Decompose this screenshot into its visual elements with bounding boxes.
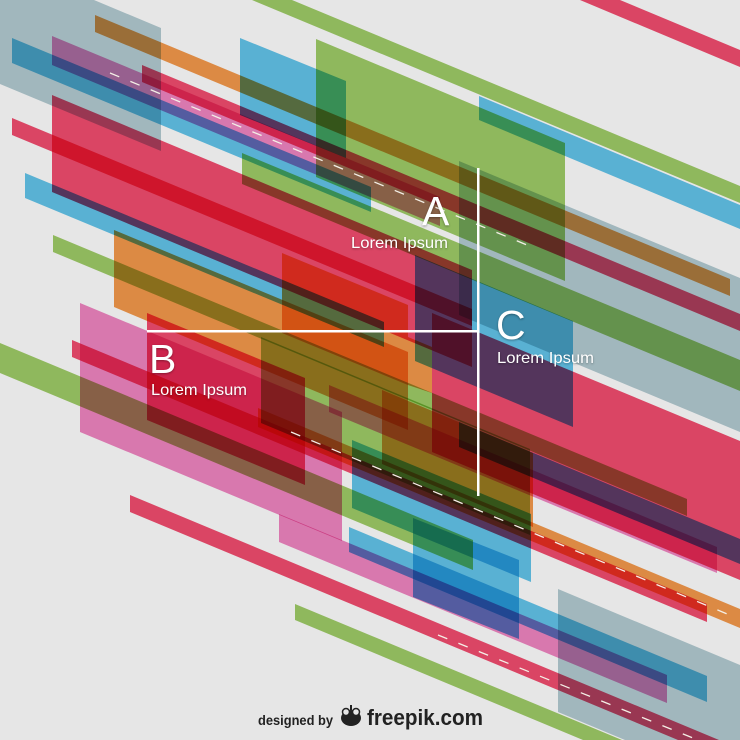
strip: red over large red	[12, 118, 472, 326]
box: lower orange	[382, 390, 533, 527]
box: upper blue	[240, 38, 346, 158]
strip: top right red	[580, 0, 740, 67]
box: large orange	[114, 230, 408, 430]
box: large green	[316, 39, 565, 281]
strip: dashed orange	[258, 408, 740, 628]
strip: right blue	[479, 96, 740, 229]
strip: mid blue	[25, 173, 384, 347]
strip: long orange	[95, 15, 730, 296]
strip: wide green	[242, 153, 740, 391]
strip: right blue lower	[459, 422, 740, 564]
label A: A	[422, 188, 450, 234]
strip: upper red	[142, 65, 740, 331]
box: central green	[261, 337, 530, 535]
label C: C	[496, 302, 526, 348]
label B	[149, 336, 247, 399]
box: right red	[432, 313, 740, 580]
panel: grey right	[459, 161, 740, 432]
white cross axes	[147, 168, 480, 496]
footer credit: freepik.com	[367, 705, 483, 730]
strip: top green	[252, 0, 740, 203]
label B: Lorem Ipsum	[151, 382, 247, 399]
strip: bottom green	[295, 604, 622, 740]
label B: B	[149, 336, 176, 382]
box: C blue	[415, 255, 573, 427]
strip: upper pink	[52, 36, 440, 226]
box: lower blue	[352, 440, 531, 582]
box: B red	[147, 313, 305, 485]
box: bottom blue	[413, 518, 519, 639]
label A: Lorem Ipsum	[351, 235, 448, 252]
box: orange over red	[282, 253, 408, 385]
footer credit	[258, 705, 483, 730]
icon: freepik logo	[341, 705, 361, 726]
panel: grey top left	[0, 0, 161, 151]
strip: pink red right	[329, 385, 717, 573]
strip: bottom blue	[349, 527, 707, 702]
label C: Lorem Ipsum	[497, 350, 594, 367]
label A	[351, 188, 450, 252]
strip: bottom red	[130, 495, 719, 740]
box: large red	[52, 95, 472, 367]
footer credit: designed by	[258, 712, 333, 728]
strip: upper blue	[12, 38, 371, 212]
panel: grey bottom right	[558, 589, 740, 740]
strip: mid green	[53, 235, 687, 516]
box: pink left	[80, 303, 342, 541]
strip: lower left green	[0, 343, 473, 570]
strip: long red	[72, 340, 707, 622]
label C	[496, 302, 594, 367]
strip: bottom pink	[279, 514, 667, 703]
dashed lines	[110, 73, 732, 740]
box: narrow orange	[408, 337, 432, 393]
